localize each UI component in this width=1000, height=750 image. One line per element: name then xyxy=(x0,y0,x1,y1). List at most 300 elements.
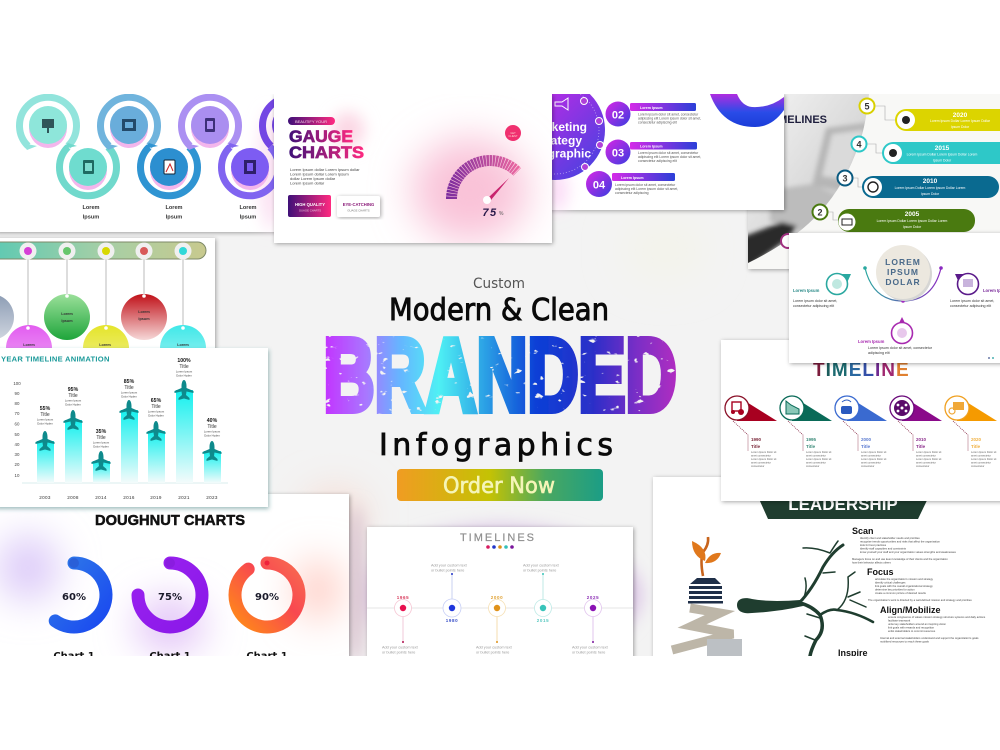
body copy: Lorem Ipsum dollar Lorem Ipsum xyxy=(290,172,349,176)
gauge title xyxy=(289,127,364,162)
heading align mobilize: Align/Mobilize xyxy=(880,605,940,615)
kicker pill: BEAUTIFY YOUR xyxy=(295,119,327,124)
step 02: Lorem Ipsum xyxy=(640,106,663,110)
pill 2020: 2020 xyxy=(953,112,968,119)
custom text notes: or bullet points here xyxy=(382,650,415,654)
pin 2000: Lorem Ipsum Dolor sit xyxy=(861,450,887,454)
badge eye-catching: EYE-CATCHING xyxy=(343,202,374,207)
step labels: Lorem xyxy=(82,205,100,211)
hub circle xyxy=(876,245,932,301)
pin 2000: amet consectetur xyxy=(861,460,881,464)
pink tag: GET xyxy=(510,131,516,135)
bar 2016: Lorem Ipsum xyxy=(121,390,138,394)
pin 2000: 2000 xyxy=(861,437,872,442)
pin 2020: Lorem Ipsum Dolor sit xyxy=(971,450,997,454)
step 02: consectetur adipiscing elit xyxy=(638,120,677,124)
heading align mobilize: facilitate teamwork xyxy=(888,618,911,622)
y axis labels: 90 xyxy=(15,391,20,396)
node 2015 xyxy=(534,573,552,623)
bar 2008: 2008 xyxy=(67,495,79,500)
step 03: adipiscing elit Lorem ipsum dolor sit amet, xyxy=(638,155,701,159)
step ring 5 xyxy=(181,97,238,150)
hub circle: IPSUM xyxy=(887,267,919,277)
heading scan: Identify client and stakeholder needs and priorities xyxy=(860,536,920,540)
headline: infographics: Infographics xyxy=(379,428,613,463)
bar 2021: 2021 xyxy=(178,495,190,500)
custom text notes xyxy=(382,564,609,654)
hub circle: LOREM xyxy=(885,257,921,267)
body copy: Lorem Ipsum dollar xyxy=(290,180,325,186)
bar 2008: Lorem Ipsum xyxy=(65,398,82,402)
bar 2008: Dolor Hyden xyxy=(65,402,81,406)
badge high quality: HIGH QUALITY xyxy=(295,202,325,207)
doughnut 60% xyxy=(53,558,106,662)
kicker pill xyxy=(288,117,335,125)
badge eye-catching: GUAGE CHARTS xyxy=(347,208,370,212)
custom text notes: Add your custom text xyxy=(523,564,560,568)
heading scan: identify staff capacities and constraints xyxy=(860,546,907,550)
circle title: Marketing xyxy=(530,120,587,134)
connector bar xyxy=(0,242,206,259)
purple pin: consectetur adipiscing elit xyxy=(950,304,991,308)
number badges xyxy=(812,98,874,220)
pin 2010 xyxy=(890,396,942,468)
magenta pin xyxy=(858,317,933,355)
pin 2020: consectetur xyxy=(971,464,985,468)
heading scan: recognize trends opportunities and risks that affect the organization xyxy=(860,540,940,544)
pill 2015 xyxy=(882,142,1000,164)
pill 2005: Ipsum Dolor xyxy=(903,225,922,229)
step labels xyxy=(82,205,257,220)
bar 2008: Title xyxy=(68,393,78,399)
blue 3D swoop xyxy=(710,94,784,127)
node 2000 xyxy=(488,595,506,643)
step ring 4 xyxy=(140,143,198,196)
perimeter nodes xyxy=(580,98,604,170)
leadership banner: LEADERSHIP xyxy=(788,495,898,514)
pin 2020 xyxy=(945,396,997,468)
headline: modern and clean: Modern & Clean xyxy=(389,293,609,328)
badge high quality xyxy=(288,195,331,217)
panel: circular process steps xyxy=(0,94,320,232)
pin 1995: amet consectetur xyxy=(806,454,826,458)
heading scan: know yourself your staff and your organization values strengths and weaknesses xyxy=(860,550,957,554)
step 02: 02 xyxy=(612,110,624,122)
bar 2021: Dolor Hyden xyxy=(176,374,192,378)
bar dots xyxy=(20,242,192,260)
pin 2000 xyxy=(835,396,887,468)
heading focus: determine key priorities for action xyxy=(875,588,915,592)
bar 2003: 55% xyxy=(40,406,51,412)
magenta pin: adipiscing elit xyxy=(868,351,890,355)
panel heading: TIMELINES xyxy=(768,114,827,126)
pin 2020: Lorem Ipsum Dolor sit xyxy=(971,457,997,461)
pin 1995 xyxy=(780,396,832,468)
custom text notes: Add your custom text xyxy=(572,646,609,650)
page background xyxy=(0,94,1000,656)
gauge dial xyxy=(452,161,517,199)
pin 1990: 1990 xyxy=(751,437,762,442)
step ring 3 xyxy=(100,97,157,150)
step 03: 03 xyxy=(612,148,624,160)
panel: timelines with pills xyxy=(740,94,1000,269)
circle title: Infographic xyxy=(526,146,591,160)
heading scan xyxy=(852,526,957,564)
number badges: 2 xyxy=(817,208,823,218)
step 04 xyxy=(586,171,678,197)
bar 2008: 95% xyxy=(68,387,79,393)
panel: marketing strategy xyxy=(505,80,784,212)
pin 2020: amet consectetur xyxy=(971,454,991,458)
pill 2015: Ipsum Dolor xyxy=(933,158,952,162)
teal pin xyxy=(793,274,851,308)
hanging strings xyxy=(28,251,183,328)
bar 2014: Lorem Ipsum xyxy=(93,440,110,444)
pin 1990: consectetur xyxy=(751,464,765,468)
body copy: dollar Lorem Ipsum dollar xyxy=(290,176,336,181)
bar 2023: Title xyxy=(207,424,217,430)
teal pin: Lorem ipsum dolor sit amet, xyxy=(793,299,837,303)
step 02: adipiscing elit Lorem ipsum dolor sit amet, xyxy=(638,116,701,120)
marketing circle xyxy=(505,80,605,180)
step 03: Lorem ipsum dolor sit amet, consectetur xyxy=(638,151,699,155)
doughnut 60%: 60% xyxy=(62,592,86,603)
bar 2003: 2003 xyxy=(39,495,51,500)
step 04: 04 xyxy=(593,180,606,192)
heading align mobilize: ensure congruence of values mission strategy structure systems and daily actions xyxy=(888,615,986,619)
step 04: Lorem ipsum dolor sit amet, consectetur xyxy=(615,183,676,187)
pin 2010: amet consectetur xyxy=(916,454,936,458)
pill 2015: 2015 xyxy=(935,145,950,152)
sprout xyxy=(692,537,721,576)
top white band xyxy=(0,0,1000,94)
badge eye-catching xyxy=(337,196,380,217)
node 2025 xyxy=(584,595,602,643)
pill 2015: Lorem Ipsum Dollar Lorem Ipsum Dollar Lorem xyxy=(907,152,978,156)
bar 2019 xyxy=(146,398,166,500)
heading align mobilize xyxy=(880,605,986,644)
step ring 7 xyxy=(262,97,320,146)
doughnut 90% xyxy=(235,560,299,662)
pin 2000: consectetur xyxy=(861,464,875,468)
step 03: consectetur adipiscing elit xyxy=(638,159,677,163)
page dots xyxy=(988,357,994,359)
bottom white band xyxy=(0,656,1000,750)
bar 2016: Dolor Hyden xyxy=(121,394,137,398)
heading focus: Focus xyxy=(867,567,894,577)
bar 2016: Title xyxy=(124,385,134,391)
pin 1990 xyxy=(725,396,777,468)
pin 1995: Title xyxy=(806,444,816,449)
panel: lorem ipsum dolar hub xyxy=(789,233,1000,363)
pin 1995: amet consectetur xyxy=(806,460,826,464)
y axis labels: 30 xyxy=(15,452,20,457)
panel: year timeline animation xyxy=(0,348,268,507)
pill 2010: 2010 xyxy=(923,178,938,185)
gauge value: 75 xyxy=(482,207,498,219)
teal pin: consectetur adipiscing elit xyxy=(793,304,834,308)
y axis labels: 100 xyxy=(13,381,21,386)
pin 2010: Title xyxy=(916,444,926,449)
y axis labels: 80 xyxy=(15,401,20,406)
hub circle: DOLAR xyxy=(885,277,921,287)
branching tree xyxy=(737,541,873,656)
magenta pin: Lorem ipsum dolor sit amet, consectetur xyxy=(868,346,933,350)
pin 2000: Title xyxy=(861,444,871,449)
pin 1995: Lorem Ipsum Dolor sit xyxy=(806,450,832,454)
bar 2016: 85% xyxy=(124,379,135,385)
chart title: YEAR TIMELINE ANIMATION xyxy=(1,354,110,364)
step labels: Ipsum xyxy=(240,214,256,220)
bar 2019: Lorem Ipsum xyxy=(148,410,165,414)
heading align mobilize: unite key stakeholders around an inspiring vision xyxy=(888,622,946,626)
pill 2010: Lorem Ipsum Dollar Lorem Ipsum Dollar Lorem xyxy=(895,186,966,190)
heading focus: create a common picture of desired results xyxy=(875,591,926,595)
step labels: Lorem xyxy=(239,205,257,211)
hanging balls: Lorem xyxy=(177,343,189,347)
pill 2010: Ipsum Dolor xyxy=(921,192,940,196)
pill 2010 xyxy=(862,176,999,198)
heading align mobilize: link goals with rewards and recognition xyxy=(888,626,935,630)
bar 2021: 100% xyxy=(177,358,191,364)
step 03: Lorem Ipsum xyxy=(640,144,663,148)
step 04: Lorem Ipsum xyxy=(621,176,644,180)
heading inspire: Inspire xyxy=(838,648,868,658)
bar 2019: 65% xyxy=(151,398,162,404)
heading scan: look for best practices xyxy=(860,543,887,547)
pin 2020: amet consectetur xyxy=(971,460,991,464)
y axis labels: 60 xyxy=(15,422,20,426)
panel: line timelines xyxy=(367,527,633,667)
node 1980: 1980 xyxy=(446,618,458,623)
bar 2014: Dolor Hyden xyxy=(93,444,109,448)
pin 1995: consectetur xyxy=(806,464,820,468)
node 2015: 2015 xyxy=(537,618,549,623)
panel: timeline with pins xyxy=(721,340,1000,501)
panel: hanging balls timeline xyxy=(0,236,219,348)
gauge needle xyxy=(483,178,509,204)
pin 1990: amet consectetur xyxy=(751,460,771,464)
pill 2020: Ipsum Dolor xyxy=(951,125,970,129)
timelines heading: TIMELINES xyxy=(460,532,536,544)
bar 2003 xyxy=(36,406,54,500)
pin 2010: 2010 xyxy=(916,437,927,442)
bar 2014: 35% xyxy=(96,429,107,435)
step 04: consectetur adipiscing xyxy=(615,191,649,195)
node 2025: 2025 xyxy=(587,595,599,600)
step ring 2 xyxy=(60,143,116,196)
laptop photo xyxy=(748,94,869,263)
circle title: Strategy xyxy=(534,134,582,148)
step ring 1 xyxy=(20,97,76,150)
custom text notes: or bullet points here xyxy=(476,650,509,654)
button: order now xyxy=(397,469,603,501)
bar 2003: Lorem Ipsum xyxy=(37,418,54,422)
doughnut 90%: Chart 1 xyxy=(246,651,288,662)
button: order now: Order Now xyxy=(443,474,555,499)
bar 2016 xyxy=(120,379,138,500)
doughnut 60%: Chart 1 xyxy=(53,651,95,662)
pin 1990: Lorem Ipsum Dolor sit xyxy=(751,450,777,454)
colour dots xyxy=(486,545,514,549)
step 03 xyxy=(606,140,701,164)
bar 2021: Lorem Ipsum xyxy=(176,370,193,374)
heading align mobilize: mobilized resources to reach these goals xyxy=(880,640,930,644)
bar 2003: Dolor Hyden xyxy=(37,422,53,426)
heading align mobilize: enlist stakeholders to commit resources xyxy=(888,629,936,633)
step labels: Ipsum xyxy=(83,214,99,220)
pink tag xyxy=(505,125,521,141)
hanging balls: Lorem xyxy=(23,343,35,347)
bar 2003: Title xyxy=(40,412,50,418)
hub arc xyxy=(863,266,943,303)
body copy xyxy=(290,167,360,186)
pink tag: CLIENT xyxy=(508,134,518,138)
custom text notes: Add your custom text xyxy=(431,564,468,568)
bar 2023: Dolor Hyden xyxy=(204,434,220,438)
striped dome xyxy=(688,578,723,604)
y axis labels: 20 xyxy=(15,462,20,467)
node 1980 xyxy=(443,573,461,623)
gauge value: % xyxy=(499,211,504,217)
connectors xyxy=(828,106,895,220)
heading focus: The organization's work is directed by a well-defined mission and strategy and priorities xyxy=(868,598,972,602)
step 02 xyxy=(606,102,701,126)
pill 2005 xyxy=(838,209,975,232)
step ring 6 xyxy=(222,143,278,196)
bar 2021 xyxy=(174,358,194,500)
heading scan: Managers focus on and use keen knowledge of their clients and the organization xyxy=(852,557,948,561)
pin 2020: Title xyxy=(971,444,981,449)
bar 2019: 2019 xyxy=(150,495,162,500)
heading focus: link goals with the overall organizational strategy xyxy=(875,584,933,588)
pin 1995: Lorem Ipsum Dolor sit xyxy=(806,457,832,461)
step 02: Lorem ipsum dolor sit amet, consectetur xyxy=(638,112,699,116)
leadership banner xyxy=(755,490,932,519)
y axis labels: 50 xyxy=(15,432,20,437)
headline: custom: Custom xyxy=(473,276,525,292)
bar 2021: Title xyxy=(179,364,189,370)
gauge title: CHARTS xyxy=(289,143,364,162)
heading scan: Scan xyxy=(852,526,874,536)
pin 1990: amet consectetur xyxy=(751,454,771,458)
hanging balls xyxy=(0,294,206,348)
custom text notes: or bullet points here xyxy=(572,650,605,654)
zigzag spring xyxy=(672,608,742,656)
bar 2023: Lorem Ipsum xyxy=(204,430,221,434)
number badges: 4 xyxy=(856,140,862,150)
heading focus: identify critical challenges xyxy=(875,580,906,584)
bar 2023: 40% xyxy=(207,418,218,424)
pill 2020: Lorem Ipsum Dollar Lorem Ipsum Dollar xyxy=(930,119,991,123)
pin 2000: amet consectetur xyxy=(861,454,881,458)
bar 2019: Title xyxy=(151,404,161,410)
node 2000: 2000 xyxy=(491,595,503,600)
bar 2023 xyxy=(202,418,222,500)
megaphone icon xyxy=(555,98,568,110)
partial pink badge xyxy=(781,234,795,248)
heading focus xyxy=(867,567,972,602)
stems xyxy=(403,574,593,642)
pin 1990: Lorem Ipsum Dolor sit xyxy=(751,457,777,461)
heading align mobilize: Internal and external stakeholders understand and support the organization's goals xyxy=(880,636,979,640)
bar 2014 xyxy=(92,429,110,500)
baseline xyxy=(22,482,228,484)
node 1965: 1965 xyxy=(397,595,409,600)
pill 2005: Lorem Ipsum Dollar Lorem Ipsum Dollar Lorem xyxy=(877,219,948,223)
pin 1990: Title xyxy=(751,444,761,449)
doughnut 90%: 90% xyxy=(255,592,279,603)
hanging balls: Lorem xyxy=(99,343,111,347)
bar 2023: 2023 xyxy=(206,495,218,500)
custom text notes: Add your custom text xyxy=(476,646,513,650)
y axis labels: 40 xyxy=(15,442,20,447)
panel: gauge charts xyxy=(274,94,552,243)
bar 2019: Dolor Hyden xyxy=(148,414,164,418)
panel: leadership xyxy=(653,477,1000,667)
pin 2010: Lorem Ipsum Dolor sit xyxy=(916,450,942,454)
pin 1995: 1995 xyxy=(806,437,817,442)
background colour glows xyxy=(305,220,705,665)
doughnut 75%: 75% xyxy=(158,592,182,603)
node 1965 xyxy=(394,595,412,643)
hanging balls: Lorem xyxy=(61,312,73,316)
pin 2000: Lorem Ipsum Dolor sit xyxy=(861,457,887,461)
badge high quality: GUAGE CHARTS xyxy=(299,208,321,212)
bar 2008 xyxy=(64,387,82,500)
panel: doughnut charts xyxy=(0,494,349,664)
step 04: adipiscing elit Lorem ipsum dolor sit amet, xyxy=(615,187,678,191)
y axis labels: 10 xyxy=(15,473,20,478)
bar 2014: Title xyxy=(96,435,106,441)
y axis labels: 70 xyxy=(15,411,20,416)
pill 2005: 2005 xyxy=(905,211,920,218)
axis line xyxy=(367,607,633,609)
y axis labels xyxy=(13,381,21,478)
headline: branded: BRANDED xyxy=(324,318,676,432)
doughnut 75%: Chart 1 xyxy=(149,651,191,662)
pin 2010: amet consectetur xyxy=(916,460,936,464)
pin 2010: consectetur xyxy=(916,464,930,468)
teal pin: Lorem Ipsum xyxy=(793,288,820,293)
step labels: Ipsum xyxy=(166,214,182,220)
circle title xyxy=(526,120,591,160)
gauge title: GAUGE xyxy=(289,127,353,146)
doughnut 75% xyxy=(138,558,202,662)
heading scan: how their behavior affects others xyxy=(852,560,891,564)
hanging balls: Ipsum xyxy=(138,317,150,321)
step labels: Lorem xyxy=(165,205,183,211)
custom text notes: Add your custom text xyxy=(382,646,419,650)
custom text notes: or bullet points here xyxy=(431,568,464,572)
pill 2020 xyxy=(895,109,1000,131)
hanging balls: Ipsum xyxy=(61,319,73,323)
bar 2016: 2016 xyxy=(123,495,135,500)
doughnut title: DOUGHNUT CHARTS xyxy=(95,512,245,529)
custom text notes: or bullet points here xyxy=(523,568,556,572)
pin 2010: Lorem Ipsum Dolor sit xyxy=(916,457,942,461)
pin 2020: 2020 xyxy=(971,437,982,442)
timeline heading: TIMELINE xyxy=(813,360,910,381)
purple pin xyxy=(950,274,1000,308)
heading focus: articulate the organization's mission and strategy xyxy=(875,577,934,581)
number badges: 3 xyxy=(842,174,848,184)
body copy: Lorem Ipsum dollar Lorem Ipsum dollar xyxy=(290,167,360,172)
hanging balls: Lorem xyxy=(138,310,150,314)
bar 2014: 2014 xyxy=(95,495,107,500)
purple pin: Lorem ipsum dolor sit amet, xyxy=(950,299,994,303)
number badges: 5 xyxy=(864,102,870,112)
